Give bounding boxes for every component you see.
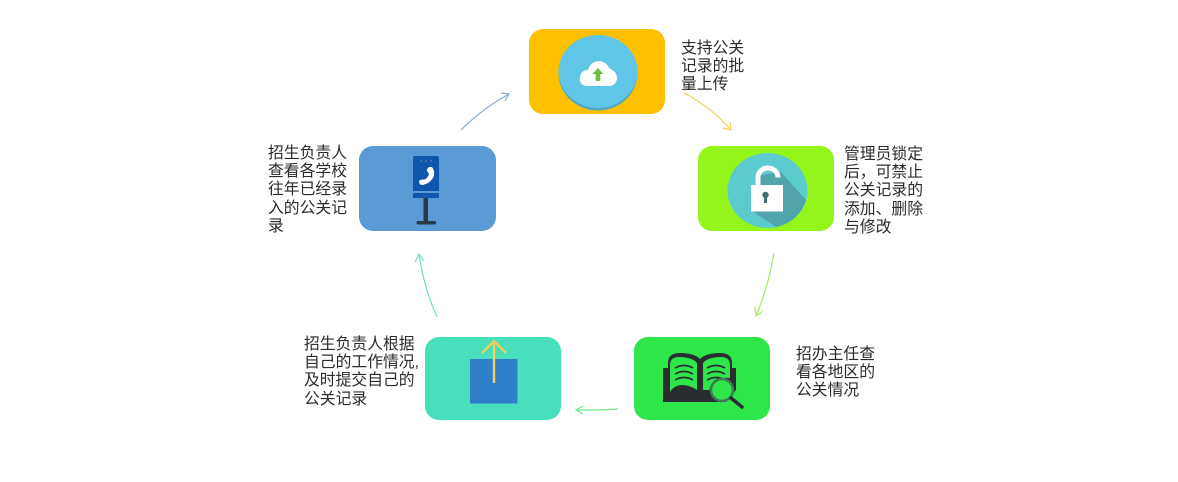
text: submit description: 自己的工作情况, xyxy=(304,354,419,371)
text: phone description xyxy=(268,144,347,235)
text: lock description: 公关记录的 xyxy=(844,182,923,199)
text: book description: 看各地区的 xyxy=(796,364,875,381)
text: book description xyxy=(796,345,875,399)
panel: phone card xyxy=(359,146,496,231)
arrow: submit to phone xyxy=(415,254,437,317)
panel: submit card xyxy=(424,336,560,420)
text: lock description: 管理员锁定 xyxy=(844,146,923,162)
text: book description: 公关情况 xyxy=(796,382,859,399)
icon: phone booth xyxy=(413,156,439,224)
text: phone description: 查看各学校 xyxy=(268,163,347,180)
text: upload description: 量上传 xyxy=(681,76,728,93)
text: submit description: 及时提交自己的 xyxy=(304,372,415,389)
text: lock description: 与修改 xyxy=(844,219,891,236)
text: book description: 招办主任查 xyxy=(796,346,875,362)
panel: upload card xyxy=(529,29,665,114)
panel: lock card xyxy=(698,146,834,231)
arrow: upload to lock xyxy=(684,93,731,130)
icon: box with up arrow xyxy=(470,341,518,404)
icon: cloud upload xyxy=(558,35,638,110)
icon: open padlock xyxy=(728,153,808,228)
text: phone description: 入的公关记 xyxy=(268,200,347,217)
text: phone description: 招生负责人 xyxy=(268,144,347,162)
icon: book with magnifier xyxy=(663,353,742,407)
text: phone description: 往年已经录 xyxy=(268,181,347,198)
arrow: phone to upload xyxy=(461,93,509,130)
arrow: book to submit xyxy=(576,406,618,414)
text: lock description: 后，可禁止 xyxy=(844,164,923,181)
text: phone description: 录 xyxy=(268,218,284,235)
text: submit description xyxy=(304,335,419,408)
text: submit description: 公关记录 xyxy=(304,391,367,408)
text: upload description xyxy=(681,39,744,93)
text: submit description: 招生负责人根据 xyxy=(304,336,415,352)
text: upload description: 支持公关 xyxy=(681,40,744,56)
text: upload description: 记录的批 xyxy=(681,58,744,75)
text: lock description: 添加、删除 xyxy=(844,201,923,218)
text: lock description xyxy=(844,145,923,236)
arrow: lock to book xyxy=(755,253,774,316)
panel: book card xyxy=(634,336,770,420)
